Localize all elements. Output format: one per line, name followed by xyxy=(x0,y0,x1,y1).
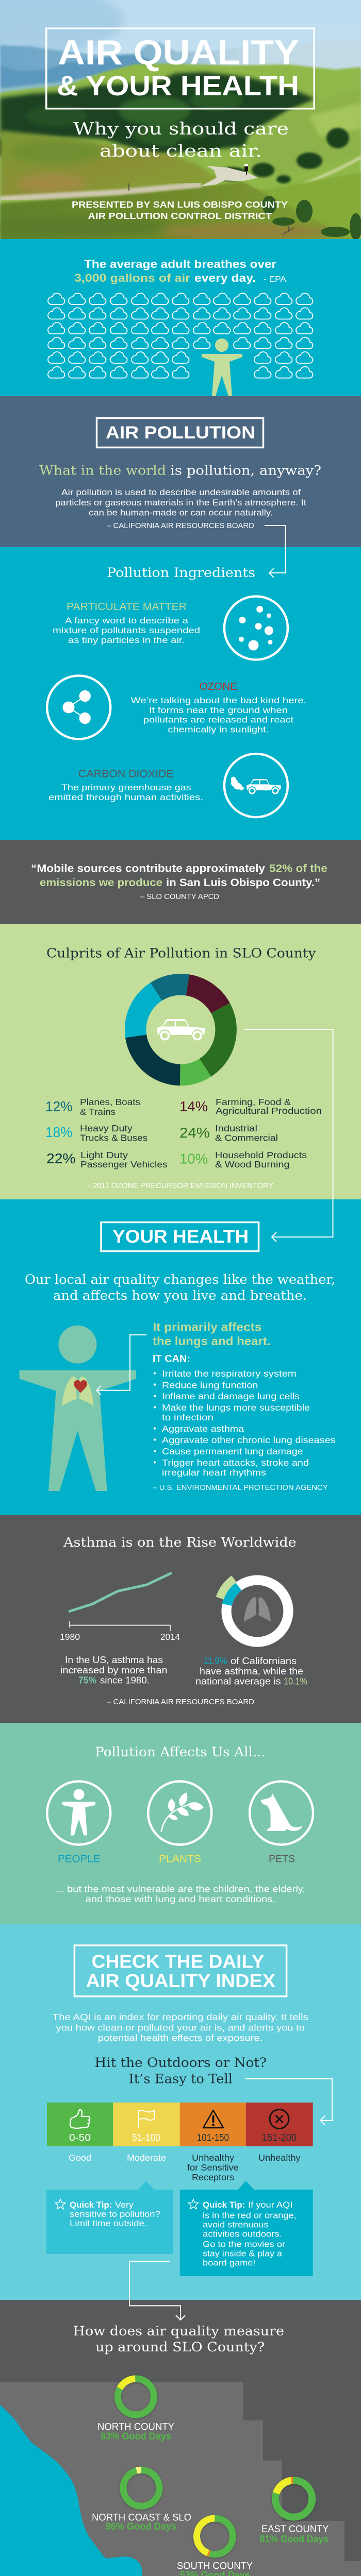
breath statistic xyxy=(74,258,286,284)
list of health effects: Reduce lung function xyxy=(162,1380,258,1390)
legend: industrial: Industrial xyxy=(215,1123,257,1133)
donut: north county xyxy=(118,2379,154,2415)
aqi scale: unhealthy xyxy=(246,2103,313,2146)
label: north coast and slo xyxy=(92,2512,191,2532)
heading box: your health xyxy=(101,1222,259,1251)
quick tip: red or orange aqi: Quick Tip: xyxy=(203,2200,245,2210)
labels: people, plants, pets xyxy=(58,1854,295,1865)
presenter credit: PRESENTED BY SAN LUIS OBISPO COUNTY xyxy=(72,199,288,210)
legend: industrial: & Commercial xyxy=(215,1133,278,1143)
line chart: asthma increase: 1980 xyxy=(60,1632,80,1642)
ozone text: OZONE xyxy=(200,681,237,692)
legend: planes, boats and trains: 12% xyxy=(45,1098,73,1114)
list of health effects: Trigger heart attacks, stroke and xyxy=(162,1458,309,1468)
list of health effects: Aggravate asthma xyxy=(162,1423,244,1434)
labels: people, plants, pets: PEOPLE xyxy=(58,1854,101,1865)
aqi category labels: Moderate xyxy=(127,2153,166,2163)
lungs and heart headline: It primarily affects xyxy=(153,1320,262,1334)
label: north county: 83% Good Days xyxy=(101,2431,171,2442)
legend: planes, boats and trains: & Trains xyxy=(80,1107,116,1117)
quick tip: sensitive to pollution: sensitive to pollution? xyxy=(70,2209,160,2219)
quick tip: sensitive to pollution: Limit time outside. xyxy=(70,2218,147,2228)
section: air pollution definition xyxy=(0,396,361,547)
aqi category labels: Receptors xyxy=(192,2172,234,2182)
heading: how does air quality measure up xyxy=(73,2324,284,2355)
donut: north coast and slo xyxy=(123,2470,159,2506)
section: pollution ingredients xyxy=(0,547,361,840)
label: east county: EAST COUNTY xyxy=(261,2524,329,2535)
heading box: air pollution xyxy=(97,418,263,447)
aqi scale: unhealthy: 151-200 xyxy=(262,2133,297,2144)
heading box: air quality index: AIR QUALITY INDEX xyxy=(86,1970,275,1991)
label: north coast and slo: 96% Good Days xyxy=(105,2521,176,2532)
label: north county xyxy=(97,2421,174,2442)
labels: people, plants, pets: PLANTS xyxy=(159,1854,201,1865)
ozone text: pollutants are released and react xyxy=(143,715,293,724)
legend: light duty: Light Duty xyxy=(80,1150,128,1160)
source: emission inventory: – 2011 OZONE PRECURSOR EMISSION INVENTORY xyxy=(87,1182,273,1190)
aqi scale: moderate: 51-100 xyxy=(132,2133,160,2144)
donut: south county xyxy=(197,2518,233,2554)
section: slo county air quality map xyxy=(0,2300,361,2576)
legend: light duty: Passenger Vehicles xyxy=(80,1159,168,1170)
donut chart: emission sources xyxy=(136,985,226,1075)
legend: planes, boats and trains xyxy=(45,1097,140,1117)
legend: household products: & Wood Burning xyxy=(215,1159,290,1170)
map: county land xyxy=(0,2382,361,2576)
icon: particles xyxy=(224,597,288,659)
title text xyxy=(57,33,299,101)
quick tip: red or orange aqi: board game! xyxy=(203,2258,256,2268)
heading: how does air quality measure up: up around SLO County? xyxy=(95,2340,265,2355)
text: us asthma increase: In the US, asthma has xyxy=(65,1655,163,1665)
text: california asthma rate: 11.9% xyxy=(204,1656,227,1666)
vulnerable groups note xyxy=(56,1884,305,1904)
title text: & YOUR HEALTH xyxy=(57,71,299,101)
arrow: definition to ingredients xyxy=(265,526,286,578)
carbon dioxide text: emitted through human activities. xyxy=(48,792,203,802)
text: us asthma increase: increased by more than xyxy=(60,1665,167,1675)
icon: body with lungs and heart xyxy=(20,1326,136,1491)
aqi category labels: Unhealthy xyxy=(258,2153,301,2163)
aqi scale: good xyxy=(47,2103,113,2146)
carbon dioxide text xyxy=(48,769,203,802)
aqi scale: unhealthy for sensitive receptors xyxy=(180,2103,246,2146)
legend: farming and food: Farming, Food & xyxy=(216,1097,291,1107)
map: ocean xyxy=(0,2401,361,2576)
ozone text: chemically in sunlight. xyxy=(168,724,269,734)
intro sentence: Our local air quality changes like the weather, xyxy=(25,1272,335,1287)
quote: in San Luis Obispo County.” xyxy=(166,877,320,889)
subtitle: Why you should care xyxy=(73,118,289,139)
text: california asthma rate: national average is xyxy=(195,1676,281,1687)
aqi explanation: you how clean or polluted your air is, and alerts you to xyxy=(56,2022,305,2032)
definition paragraph: Air pollution is used to describe undesirable amounts of xyxy=(61,487,301,497)
legend: heavy duty: Heavy Duty xyxy=(80,1123,133,1133)
heading: culprits: Culprits of Air Pollution in SLO County xyxy=(46,946,316,961)
ozone text xyxy=(131,681,306,734)
source: us epa: – U.S. ENVIRONMENTAL PROTECTION AGENCY xyxy=(153,1484,328,1492)
heading box: your health: YOUR HEALTH xyxy=(112,1227,249,1247)
quick tip: red or orange aqi: avoid strenuous xyxy=(203,2220,268,2230)
donut: east county xyxy=(275,2480,312,2517)
arrow: lungs headline to body xyxy=(96,1335,146,1395)
legend: industrial: 24% xyxy=(179,1125,210,1141)
quick tip: red or orange aqi xyxy=(180,2181,313,2276)
section: asthma xyxy=(0,1515,361,1723)
legend: light duty xyxy=(46,1150,168,1170)
intro sentence xyxy=(25,1272,335,1303)
text: california asthma rate: 10.1% xyxy=(284,1676,307,1687)
label: north county: NORTH COUNTY xyxy=(97,2421,174,2432)
legend: farming and food: Agricultural Production xyxy=(216,1106,322,1116)
quick tip: red or orange aqi: stay inside & play a xyxy=(203,2248,283,2258)
section: pollution affects us all xyxy=(0,1723,361,1924)
list of health effects: Inflame and damage lung cells xyxy=(162,1391,300,1401)
aqi category labels: for Sensitive xyxy=(187,2162,239,2173)
list of health effects: Aggravate other chronic lung diseases xyxy=(162,1435,336,1445)
aqi explanation: potential health effects of exposure. xyxy=(98,2032,262,2043)
donut chart: california asthma xyxy=(218,1571,297,1651)
definition paragraph xyxy=(55,487,306,517)
icon: person xyxy=(202,338,242,396)
list of health effects: Cause permanent lung damage xyxy=(162,1446,303,1456)
label: east county xyxy=(260,2524,329,2545)
definition paragraph: can be human-made or can occur naturally. xyxy=(89,507,273,517)
section: mobile sources quote xyxy=(0,840,361,924)
question heading: is pollution, anyway? xyxy=(170,463,321,478)
heading box: air pollution: AIR POLLUTION xyxy=(106,423,255,443)
arrow: aqi to county map xyxy=(129,2261,185,2320)
particulate matter text: as tiny particles in the air. xyxy=(68,635,185,645)
aqi scale: unhealthy for sensitive receptors: 101-150 xyxy=(197,2133,229,2144)
list of health effects: Irritate the respiratory system xyxy=(162,1368,297,1379)
breath statistic: The average adult breathes over xyxy=(84,258,276,270)
quick tip: red or orange aqi: is in the red or orange, xyxy=(203,2211,297,2221)
carbon dioxide text: The primary greenhouse gas xyxy=(61,783,191,792)
heading box: air quality index: CHECK THE DAILY xyxy=(92,1951,264,1972)
particulate matter text xyxy=(53,601,200,645)
breath statistic: - EPA xyxy=(264,275,286,284)
carbon dioxide text: CARBON DIOXIDE xyxy=(78,769,174,780)
label: north coast and slo: NORTH COAST & SLO xyxy=(92,2512,191,2523)
source: slo county apcd: – SLO COUNTY APCD xyxy=(140,893,219,901)
aqi category labels xyxy=(69,2153,301,2182)
quick tip: red or orange aqi: activities outdoors. xyxy=(203,2229,282,2239)
lungs and heart headline xyxy=(153,1320,271,1348)
hero landscape photo xyxy=(0,0,361,245)
list of health effects: to infection xyxy=(162,1412,214,1422)
cloud grid xyxy=(48,293,313,378)
aqi category labels: Unhealthy xyxy=(192,2153,234,2163)
source: california air resources board: – CALIFORNIA AIR RESOURCES BOARD xyxy=(107,1698,254,1706)
quote: 52% of the xyxy=(269,862,327,875)
list of health effects: Make the lungs more susceptible xyxy=(162,1402,310,1413)
label: east county: 81% Good Days xyxy=(260,2534,329,2545)
ozone text: We’re talking about the bad kind here. xyxy=(131,696,306,705)
legend: industrial xyxy=(179,1123,278,1143)
quote xyxy=(31,862,327,889)
section: your health xyxy=(0,1199,361,1515)
legend: household products: 10% xyxy=(179,1151,208,1167)
legend: heavy duty: 18% xyxy=(45,1124,73,1140)
text: us asthma increase: since 1980. xyxy=(100,1675,150,1686)
vulnerable groups note: ... but the most vulnerable are the children, the elderly, xyxy=(56,1884,305,1894)
heading: pollution ingredients: Pollution Ingredients xyxy=(107,565,255,581)
legend: household products xyxy=(179,1150,307,1170)
aqi scale: good: 0-50 xyxy=(69,2133,91,2144)
label: south county xyxy=(177,2561,253,2576)
section: culprits of air pollution xyxy=(0,924,361,1199)
quote: emissions we produce xyxy=(40,877,162,889)
heading: pollution affects us all: Pollution Affects Us All... xyxy=(95,1744,266,1760)
presenter credit: AIR POLLUTION CONTROL DISTRICT xyxy=(88,211,272,221)
list of health effects xyxy=(154,1368,336,1478)
question heading xyxy=(39,463,321,478)
aqi category labels: Good xyxy=(69,2153,91,2163)
quote: “Mobile sources contribute approximately xyxy=(31,862,265,875)
text: california asthma rate: have asthma, while the xyxy=(200,1666,303,1676)
quick tip: sensitive to pollution xyxy=(46,2181,173,2254)
icon: car exhaust xyxy=(224,754,288,817)
quick tip: sensitive to pollution: Very xyxy=(115,2200,134,2210)
presenter credit xyxy=(72,199,288,221)
title text: AIR QUALITY xyxy=(58,33,299,72)
legend: household products: Household Products xyxy=(215,1150,307,1160)
line chart: asthma increase: 2014 xyxy=(160,1632,180,1642)
icon: plants xyxy=(148,1782,211,1844)
labels: people, plants, pets: PETS xyxy=(269,1854,295,1865)
heading: hit the outdoors xyxy=(95,2055,267,2087)
text: california asthma rate: of Californians xyxy=(231,1656,297,1666)
quick tip: sensitive to pollution: Quick Tip: xyxy=(70,2200,112,2210)
question heading: What in the world xyxy=(39,463,166,478)
aqi scale: moderate xyxy=(113,2103,180,2146)
arrow: heading to aqi scale xyxy=(245,2079,332,2125)
section: gallons of air per day xyxy=(0,239,361,396)
text: us asthma increase: 75% xyxy=(78,1675,96,1686)
icon: ozone molecule xyxy=(47,676,110,739)
lungs and heart headline: the lungs and heart. xyxy=(153,1334,271,1348)
particulate matter text: A fancy word to describe a xyxy=(65,616,189,625)
icon: pets xyxy=(250,1782,313,1844)
quick tip: red or orange aqi: Go to the movies or xyxy=(203,2239,285,2249)
text: california asthma rate xyxy=(195,1656,307,1687)
section: check the daily air quality index xyxy=(0,1924,361,2300)
particulate matter text: mixture of pollutants suspended xyxy=(53,625,200,635)
heading box: air quality index xyxy=(74,1945,287,1996)
label: south county: SOUTH COUNTY xyxy=(177,2561,253,2571)
vulnerable groups note: and those with lung and heart conditions. xyxy=(86,1894,275,1904)
icon: people xyxy=(47,1782,110,1844)
section: hero photo with title xyxy=(0,0,361,245)
subtitle: about clean air. xyxy=(100,141,262,161)
intro sentence: and affects how you live and breathe. xyxy=(53,1288,307,1303)
legend: heavy duty xyxy=(45,1123,147,1143)
heading: how does air quality measure up: How does air quality measure xyxy=(73,2324,284,2339)
aqi explanation: The AQI is an index for reporting daily air quality. It tells xyxy=(53,2012,308,2022)
legend: farming and food xyxy=(179,1097,322,1116)
legend: planes, boats and trains: Planes, Boats xyxy=(80,1097,140,1107)
list of health effects: irregular heart rhythms xyxy=(162,1467,266,1478)
label: it can: IT CAN: xyxy=(153,1353,190,1365)
heading: hit the outdoors: Hit the Outdoors or Not? xyxy=(95,2055,267,2071)
breath statistic: 3,000 gallons of air xyxy=(74,272,190,284)
arrow: culprits to your health xyxy=(244,1029,333,1242)
legend: light duty: 22% xyxy=(46,1150,75,1166)
heading: asthma: Asthma is on the Rise Worldwide xyxy=(63,1535,297,1550)
aqi explanation xyxy=(53,2012,308,2043)
heading: hit the outdoors: It’s Easy to Tell xyxy=(129,2072,233,2087)
quick tip: red or orange aqi: If your AQI xyxy=(248,2200,292,2210)
particulate matter text: PARTICULATE MATTER xyxy=(67,601,187,613)
text: us asthma increase xyxy=(60,1655,167,1686)
legend: heavy duty: Trucks & Buses xyxy=(80,1133,147,1143)
definition paragraph: particles or gaseous materials in the Earth’s atmosphere. It xyxy=(55,498,306,507)
source: california air resources board: – CALIFORNIA AIR RESOURCES BOARD xyxy=(107,522,254,530)
title frame xyxy=(46,28,314,109)
legend: farming and food: 14% xyxy=(179,1098,208,1114)
breath statistic: every day. xyxy=(194,272,256,284)
subtitle xyxy=(73,118,289,161)
ozone text: It forms near the ground when xyxy=(149,705,288,715)
line chart: asthma increase xyxy=(60,1573,180,1642)
